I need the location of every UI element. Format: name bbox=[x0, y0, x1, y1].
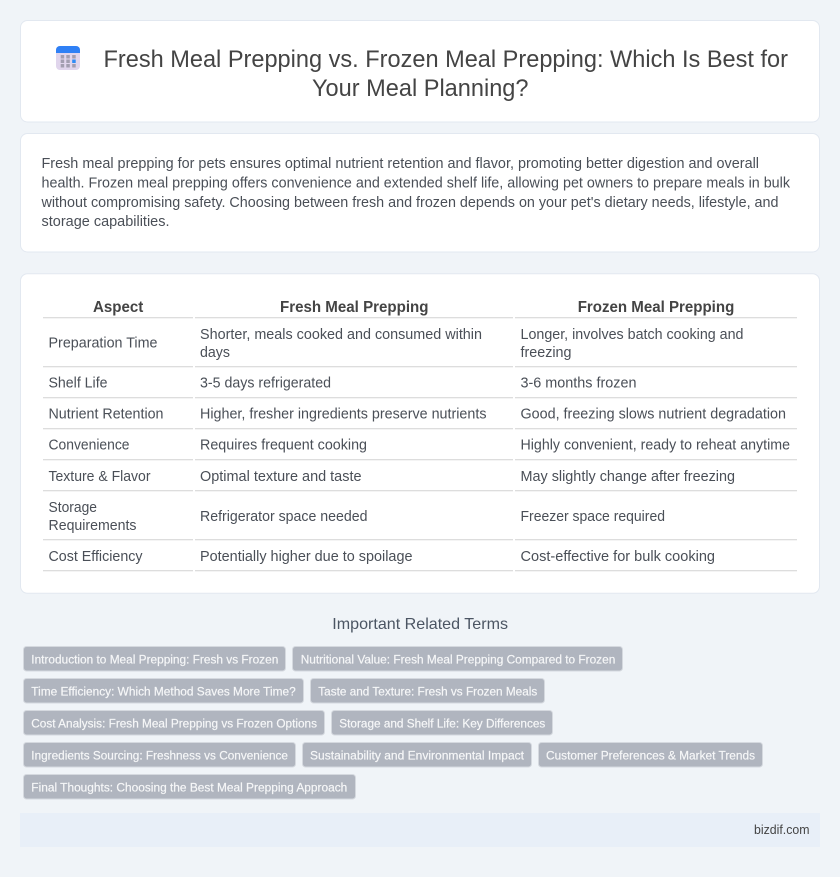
row: cost efficiency: Potentially higher due to spoilage bbox=[200, 549, 412, 565]
footer bbox=[20, 813, 820, 847]
footer: bizdif.com bbox=[754, 822, 810, 837]
row: preparation time: days bbox=[200, 345, 230, 361]
table header row: Aspect bbox=[93, 299, 144, 316]
tag bbox=[24, 710, 324, 735]
row: preparation time bbox=[48, 327, 744, 361]
row: preparation time: Preparation Time bbox=[48, 336, 158, 352]
row: convenience: Convenience bbox=[48, 438, 130, 454]
row: shelf life: 3-5 days refrigerated bbox=[200, 376, 331, 392]
title bbox=[104, 46, 788, 102]
description text: without compromising safety. Choosing between fresh and frozen depends on your pet's dietary needs, lifestyle, and bbox=[41, 195, 778, 211]
tag: Storage and Shelf Life: Key Differences bbox=[339, 716, 545, 730]
row: storage requirements: Refrigerator space needed bbox=[200, 509, 368, 525]
tag bbox=[302, 742, 532, 767]
tag bbox=[310, 678, 544, 703]
row: texture and flavor: Optimal texture and taste bbox=[200, 469, 362, 485]
description card bbox=[20, 134, 820, 252]
row: shelf life: 3-6 months frozen bbox=[520, 376, 636, 392]
row: convenience: Requires frequent cooking bbox=[200, 438, 367, 454]
tag bbox=[292, 646, 622, 671]
panel: description bbox=[20, 134, 820, 252]
row: nutrient retention: Nutrient Retention bbox=[48, 406, 164, 422]
description text bbox=[41, 156, 791, 230]
table header row: Fresh Meal Prepping bbox=[280, 299, 428, 316]
tag: Customer Preferences & Market Trends bbox=[546, 748, 755, 762]
header card bbox=[20, 20, 820, 122]
row: convenience bbox=[48, 438, 790, 454]
title: Your Meal Planning? bbox=[312, 75, 528, 102]
description text: storage capabilities. bbox=[42, 214, 170, 230]
tag: Taste and Texture: Fresh vs Frozen Meals bbox=[318, 684, 537, 698]
panel: header bbox=[20, 20, 820, 122]
panel: comparison table bbox=[20, 274, 820, 593]
tag: Time Efficiency: Which Method Saves More Time? bbox=[31, 684, 296, 698]
tag: Nutritional Value: Fresh Meal Prepping Compared to Frozen bbox=[301, 652, 615, 666]
tag: Ingredients Sourcing: Freshness vs Convenience bbox=[31, 748, 288, 762]
tag bbox=[24, 678, 304, 703]
tag: Sustainability and Environmental Impact bbox=[310, 748, 525, 762]
row: texture and flavor: Texture & Flavor bbox=[48, 469, 151, 485]
panel: related term tags bbox=[24, 646, 762, 799]
table header row: Frozen Meal Prepping bbox=[578, 299, 734, 316]
icon: calendar bbox=[56, 46, 80, 70]
row: convenience: Highly convenient, ready to reheat anytime bbox=[520, 438, 790, 454]
row: cost efficiency: Cost Efficiency bbox=[48, 549, 143, 565]
tag: Cost Analysis: Fresh Meal Prepping vs Frozen Options bbox=[31, 716, 317, 730]
table header row bbox=[93, 299, 734, 316]
row: storage requirements bbox=[48, 500, 665, 534]
row: preparation time: freezing bbox=[520, 345, 572, 361]
tag bbox=[24, 646, 286, 671]
tag bbox=[332, 710, 552, 735]
row: cost efficiency: Cost-effective for bulk cooking bbox=[520, 549, 715, 565]
row: nutrient retention: Higher, fresher ingredients preserve nutrients bbox=[200, 406, 486, 422]
table card bbox=[20, 274, 820, 593]
row: preparation time: Shorter, meals cooked and consumed within bbox=[200, 327, 482, 343]
row: shelf life: Shelf Life bbox=[48, 376, 108, 392]
row: storage requirements: Freezer space required bbox=[520, 509, 665, 525]
row: texture and flavor: May slightly change after freezing bbox=[520, 469, 735, 485]
row: shelf life bbox=[48, 376, 636, 392]
row: nutrient retention: Good, freezing slows nutrient degradation bbox=[520, 406, 786, 422]
tag: Introduction to Meal Prepping: Fresh vs Frozen bbox=[31, 652, 278, 666]
tag: Final Thoughts: Choosing the Best Meal Prepping Approach bbox=[31, 780, 347, 794]
row: cost efficiency bbox=[48, 549, 715, 565]
row: preparation time: Longer, involves batch cooking and bbox=[520, 327, 744, 343]
title: Fresh Meal Prepping vs. Frozen Meal Prepping: Which Is Best for bbox=[104, 46, 788, 73]
row: storage requirements: Storage bbox=[48, 500, 97, 516]
heading: important related terms: Important Related Terms bbox=[332, 616, 508, 633]
tag bbox=[538, 742, 762, 767]
row: storage requirements: Requirements bbox=[48, 518, 136, 534]
tag bbox=[24, 742, 296, 767]
tag bbox=[24, 774, 356, 799]
row: texture and flavor bbox=[48, 469, 735, 485]
description text: Fresh meal prepping for pets ensures optimal nutrient retention and flavor, promoting better digestion and overall bbox=[42, 156, 759, 172]
description text: health. Frozen meal prepping offers convenience and extended shelf life, allowing pet owners to prepare meals in bulk bbox=[42, 176, 791, 192]
row: nutrient retention bbox=[48, 406, 786, 422]
